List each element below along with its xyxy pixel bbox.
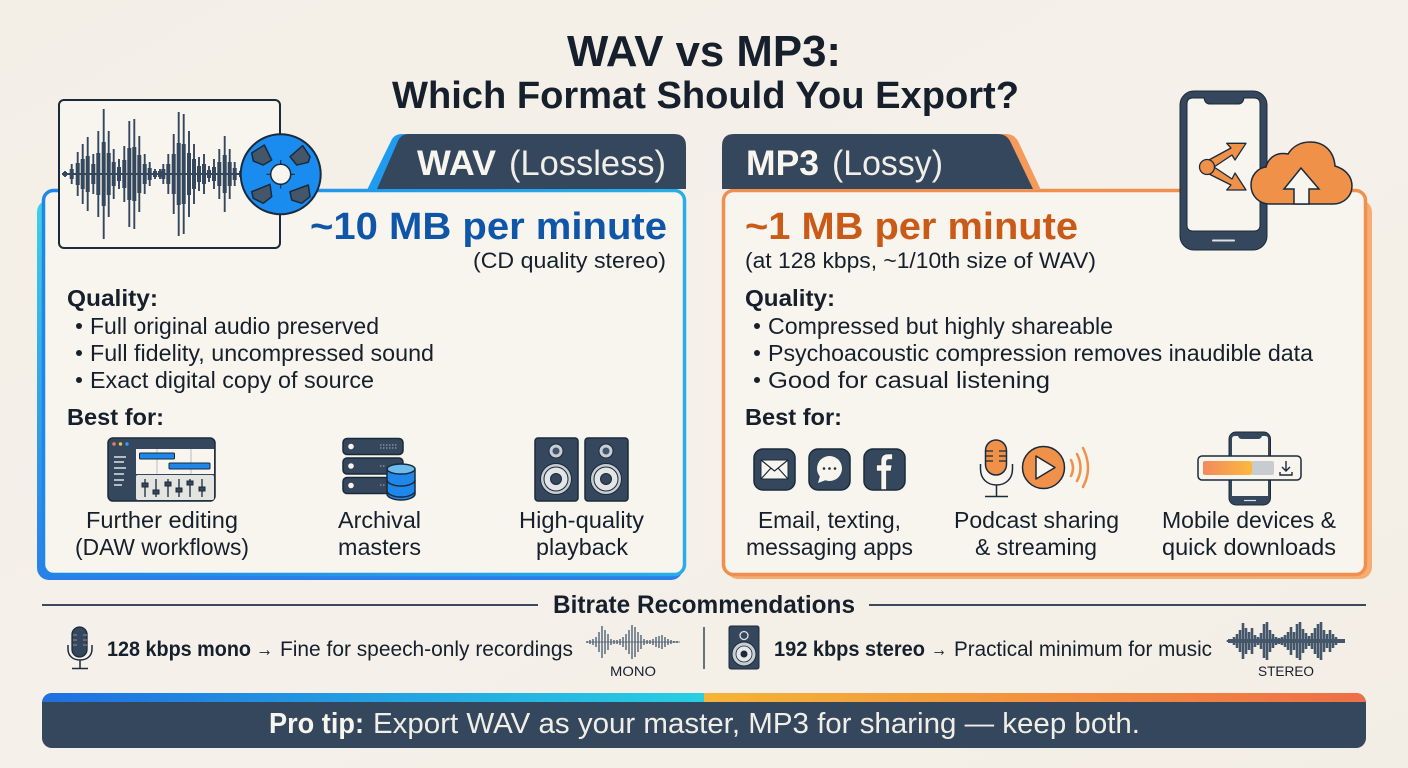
tape reel [241, 134, 321, 214]
pro tip bar [42, 693, 1366, 748]
label: mobile devices [1162, 507, 1336, 560]
WAV size heading: ~10 MB per minute [310, 206, 667, 248]
stereo recommendation: → [931, 638, 947, 661]
MP3 best for heading: Best for: [745, 404, 842, 430]
label: high-quality playback: High-quality [519, 507, 645, 533]
WAV tab: WAV [417, 144, 497, 183]
icon: speaker [729, 626, 759, 669]
label: further editing [75, 507, 249, 560]
mono recommendation: → [256, 638, 273, 661]
icon: messaging apps [754, 449, 905, 490]
mono recommendation: 128 kbps mono [107, 638, 251, 661]
MP3 panel frame [724, 190, 1372, 579]
WAV panel frame [37, 190, 684, 580]
WAV size heading [310, 206, 667, 273]
icon: audio waveform and tape reel [59, 100, 321, 248]
label: podcast sharing: & streaming [975, 534, 1097, 560]
bitrate section [42, 591, 1366, 679]
label: archival masters [338, 507, 421, 560]
mono recommendation [107, 638, 573, 661]
mono waveform: MONO [610, 663, 656, 679]
label: email texting: messaging apps [746, 534, 913, 560]
MP3 size heading [745, 206, 1096, 273]
icon: phone, share and cloud upload [1180, 91, 1352, 250]
WAV best for heading: Best for: [67, 404, 164, 430]
MP3 quality list: Compressed but highly shareable [768, 313, 1113, 339]
mono waveform [587, 625, 680, 679]
MP3 quality list: Psychoacoustic compression removes inaudible data [768, 340, 1313, 366]
MP3 size heading: (at 128 kbps, ~1/10th size of WAV) [745, 248, 1096, 273]
WAV quality list: Full fidelity, uncompressed sound [90, 340, 434, 366]
label: high-quality playback [519, 507, 645, 560]
stereo recommendation [774, 638, 1212, 661]
label: mobile devices: quick downloads [1162, 534, 1336, 560]
mono recommendation: Fine for speech-only recordings [280, 638, 573, 661]
icon: microphone [68, 627, 92, 668]
MP3 tab [722, 134, 1041, 190]
panel: WAV [37, 134, 686, 580]
phone [1180, 91, 1267, 250]
icon: server and database [343, 438, 415, 500]
label: further editing: (DAW workflows) [75, 534, 249, 560]
pro tip bar: Export WAV as your master, MP3 for sharing — keep both. [373, 708, 1140, 740]
waveform card [59, 100, 280, 248]
label: archival masters: Archival [338, 507, 421, 533]
icon: studio speakers [535, 438, 628, 501]
title: Which Format Should You Export? [392, 75, 1019, 117]
MP3 size heading: ~1 MB per minute [745, 206, 1078, 248]
MP3 tab: MP3 [746, 144, 819, 183]
label: mobile devices: Mobile devices & [1162, 507, 1336, 533]
WAV quality list: Quality: [67, 285, 158, 311]
stereo recommendation: 192 kbps stereo [774, 638, 925, 661]
stereo waveform: STEREO [1258, 663, 1314, 679]
label: high-quality playback: playback [536, 534, 629, 560]
label: podcast sharing: Podcast sharing [954, 507, 1119, 533]
bitrate heading: Bitrate Recommendations [553, 591, 855, 619]
title [392, 27, 1019, 117]
WAV quality list [67, 285, 434, 393]
WAV tab: (Lossless) [509, 144, 666, 183]
label: email texting [746, 507, 913, 560]
label: archival masters: masters [338, 534, 421, 560]
WAV quality list: Full original audio preserved [90, 313, 379, 339]
MP3 quality list: Quality: [745, 285, 835, 311]
label: further editing: Further editing [86, 507, 238, 533]
WAV quality list: Exact digital copy of source [90, 367, 374, 393]
icon: podcast mic and play [980, 440, 1088, 496]
stereo recommendation: Practical minimum for music [954, 638, 1212, 661]
WAV size heading: (CD quality stereo) [473, 248, 666, 273]
title: WAV vs MP3: [567, 27, 841, 76]
MP3 tab: (Lossy) [832, 144, 943, 183]
icon: DAW window [108, 438, 215, 501]
pro tip bar: Pro tip: [269, 708, 364, 740]
panel: MP3 [722, 134, 1372, 579]
stereo waveform [1228, 622, 1345, 679]
WAV tab [367, 134, 686, 190]
label: podcast sharing [954, 507, 1119, 560]
share arrows [1200, 143, 1246, 190]
cloud upload [1251, 142, 1352, 204]
MP3 quality list: Good for casual listening [768, 367, 1050, 393]
icon: phone download [1198, 432, 1301, 505]
label: email texting: Email, texting, [758, 507, 901, 533]
MP3 quality list [745, 285, 1313, 393]
